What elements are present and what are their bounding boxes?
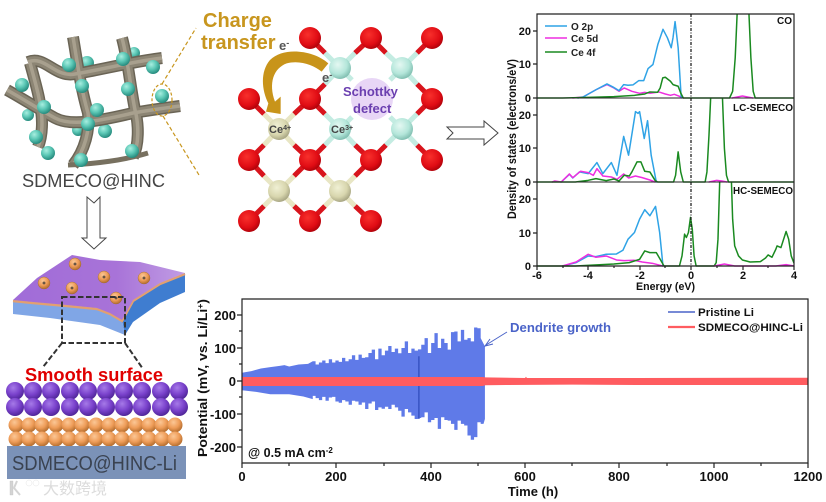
- cerium atoms beige: [268, 118, 351, 202]
- label: SDMECO@HINC: SDMECO@HINC: [22, 171, 165, 191]
- cerium atoms teal: [329, 57, 413, 140]
- label: LC-SEMECO: LC-SEMECO: [733, 103, 793, 114]
- annotation: current density: @ 0.5 mA cm: [248, 446, 326, 460]
- panel CO curves: [537, 11, 794, 98]
- label: electron 1: e: [279, 38, 286, 53]
- mesh tubes: [7, 37, 180, 165]
- interlayer spheres: [8, 418, 182, 446]
- axes frame: [533, 14, 794, 270]
- x axis tick labels: 200: [325, 469, 347, 484]
- zoom lines to crystal: [162, 28, 199, 175]
- y axis tick labels: 20: [519, 194, 531, 206]
- panel: lithium surface illustration: [13, 255, 185, 369]
- x axis tick labels: [238, 469, 822, 484]
- annotation: current density: -2: [326, 446, 333, 455]
- y axis tick labels: 0: [525, 177, 531, 189]
- x axis title: Energy (eV): [636, 281, 695, 293]
- chart: potential vs time: [195, 299, 822, 499]
- panel HC curves: [537, 179, 794, 266]
- panel: SDMECO@HINC fibre mesh: [7, 28, 199, 191]
- x axis tick labels: -2: [635, 270, 645, 282]
- y axis tick labels: 0: [525, 93, 531, 105]
- label: Schottky defect: Schottky: [343, 84, 399, 99]
- label: CO: CO: [777, 16, 792, 27]
- legend: Ce 4f: [571, 48, 596, 59]
- y axis tick labels: 10: [519, 143, 531, 155]
- x axis title: Time (h): [508, 484, 558, 499]
- label: SDMECO@HINC-Li: SDMECO@HINC-Li: [12, 453, 177, 475]
- y axis tick labels: -100: [210, 407, 236, 422]
- oxygen atoms: [238, 27, 443, 232]
- y axis tick labels: 10: [519, 59, 531, 71]
- y axis tick labels: [210, 308, 236, 455]
- arrow: charge transfer: [263, 52, 328, 114]
- y axis tick labels: 20: [519, 110, 531, 122]
- x axis tick labels: 1200: [794, 469, 822, 484]
- legend: Pristine Li: [698, 307, 754, 319]
- substrate block: [7, 446, 186, 479]
- lithium spheres: [6, 382, 188, 416]
- purple lithium top: [13, 255, 185, 320]
- y axis tick labels: [519, 26, 531, 273]
- y axis tick labels: 0: [525, 261, 531, 273]
- watermark: 大数跨境: [43, 479, 107, 498]
- annotation: dendrite growth: Dendrite growth: [510, 321, 611, 335]
- y axis title: Density of states (electrons/eV): [507, 59, 519, 219]
- x axis tick labels: 600: [514, 469, 536, 484]
- watermark: [10, 479, 107, 498]
- x axis tick labels: [532, 270, 798, 282]
- label: HC-SEMECO: HC-SEMECO: [733, 186, 793, 197]
- chart: density of states: [507, 11, 798, 293]
- y axis tick labels: 0: [229, 374, 236, 389]
- particles behind the tubes: [22, 47, 140, 138]
- heading: Charge transfer: Charge: [203, 10, 272, 32]
- y axis tick labels: 200: [214, 308, 236, 323]
- y axis title: +: [196, 303, 205, 309]
- x axis tick labels: -4: [583, 270, 594, 282]
- label: Ce4+: 4+: [283, 125, 291, 132]
- label: Ce3+: 3+: [345, 125, 353, 132]
- label: electron 1: -: [286, 38, 289, 48]
- lithium ions: [38, 258, 150, 304]
- x axis tick labels: 0: [238, 469, 246, 484]
- x axis tick labels: 4: [791, 270, 798, 282]
- x axis tick labels: 0: [688, 270, 694, 282]
- y axis tick labels: -200: [210, 440, 236, 455]
- metal-oxygen bonds: [249, 38, 432, 221]
- ion plus signs: [42, 262, 146, 300]
- highlighted particle dashed ring: [152, 84, 172, 116]
- x axis tick labels: 1000: [700, 469, 728, 484]
- y axis title: ): [195, 299, 210, 304]
- arrow: dendrite pointer: [485, 332, 507, 346]
- arrow: right: [447, 121, 498, 145]
- dashed zoom box: [43, 297, 143, 369]
- panel LC curves: [537, 95, 794, 182]
- right side face: [122, 273, 185, 335]
- label: Ce3+: Ce: [331, 124, 345, 136]
- SDMECO@HINC-Li voltage trace: [242, 377, 808, 386]
- x axis tick labels: -6: [532, 270, 542, 282]
- y axis title: Potential (mV, vs. Li/Li: [195, 320, 210, 457]
- arrow: down: [82, 197, 106, 249]
- x axis tick labels: 2: [740, 270, 746, 282]
- label: electron 2: -: [329, 70, 332, 80]
- teal nanoparticles: [15, 52, 169, 167]
- panel: crystal structure with Schottky defect: [238, 27, 443, 232]
- heading: Smooth surface: Smooth surface: [25, 365, 163, 385]
- y axis tick labels: 10: [519, 228, 531, 240]
- heading: Charge transfer: transfer: [201, 32, 276, 54]
- y axis tick labels: 20: [519, 26, 531, 38]
- orange interlayer edge: [13, 274, 185, 321]
- label: Ce4+: Ce: [269, 124, 283, 136]
- y axis tick labels: 100: [214, 341, 236, 356]
- label: electron 2: e: [322, 70, 329, 85]
- front face: [13, 300, 125, 335]
- panel: atomic layers: [6, 382, 188, 479]
- legend: SDMECO@HINC-Li: [698, 322, 803, 334]
- legend: [545, 22, 598, 59]
- label: Schottky defect: defect: [353, 101, 392, 116]
- legend: O 2p: [571, 22, 593, 33]
- legend: Ce 5d: [571, 34, 598, 45]
- x axis tick labels: 400: [420, 469, 442, 484]
- pristine Li voltage trace: [242, 328, 808, 440]
- legend: [668, 307, 803, 334]
- defect halo: [351, 78, 393, 120]
- x axis tick labels: 800: [608, 469, 630, 484]
- axes frame: [237, 299, 808, 468]
